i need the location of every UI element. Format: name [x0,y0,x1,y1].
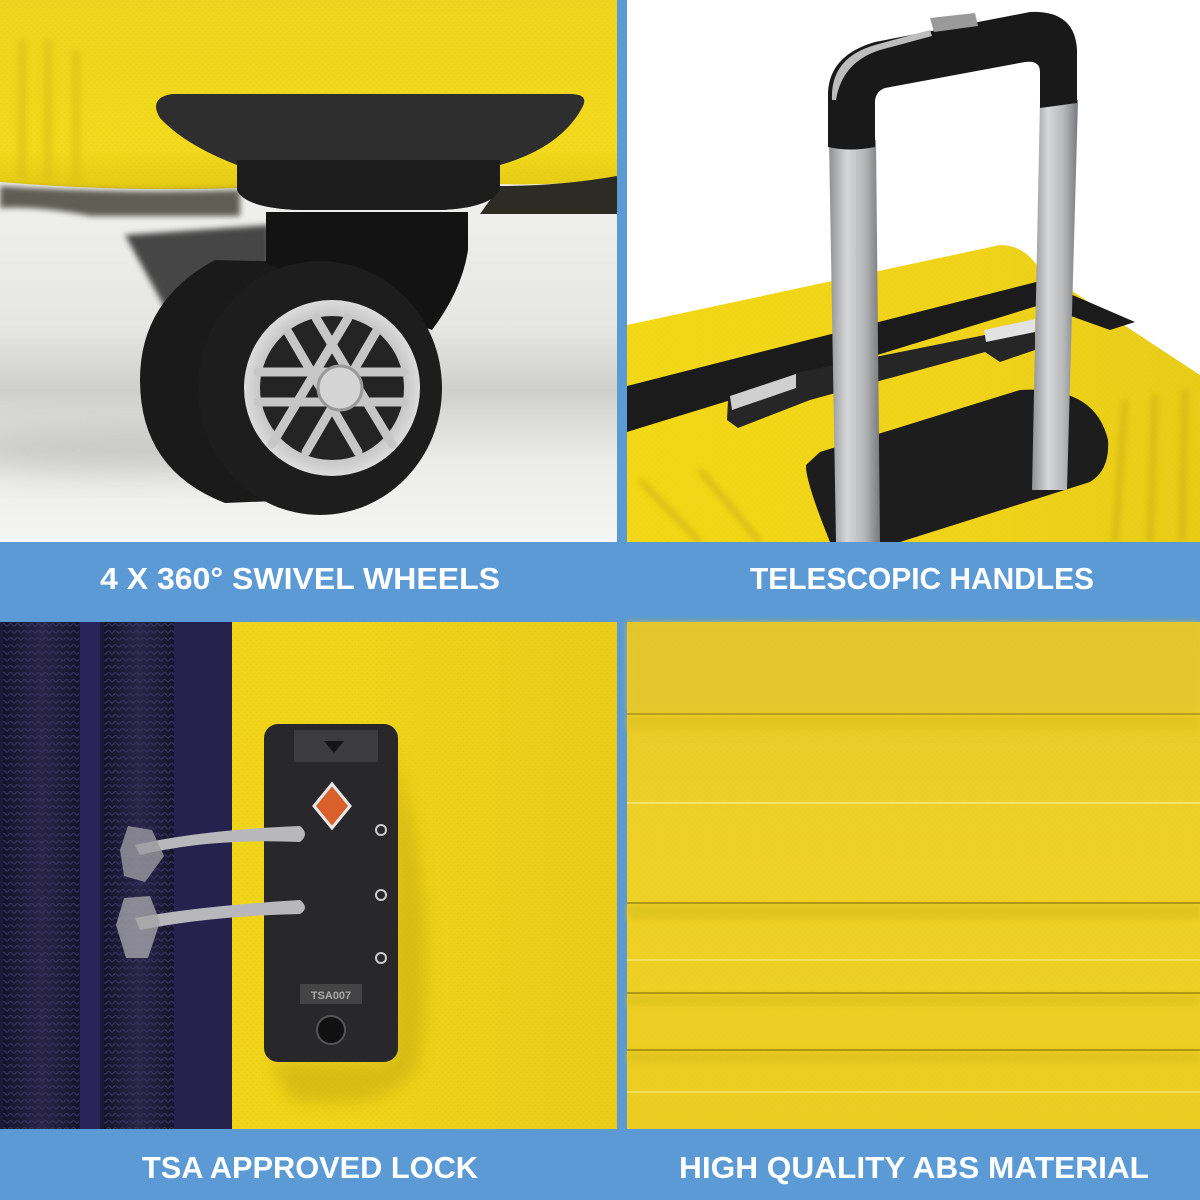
panel: swivel wheels photo [0,0,617,542]
panel: telescopic handles photo [627,0,1200,542]
icon: front wheel [244,261,442,515]
caption: ABS material: HIGH QUALITY ABS MATERIAL [679,1150,1149,1185]
suitcase ridges [22,40,76,184]
suitcase body [627,240,1200,542]
icon: zipper pull [727,319,1035,428]
icon: telescopic handle [828,12,1078,542]
icon: zipper pulls [116,826,305,958]
handle well [806,390,1108,542]
icon: wheel base plate [156,94,584,210]
panel: TSA lock photo [0,622,617,1129]
caption: TSA lock: TSA APPROVED LOCK [142,1150,479,1185]
caption: swivel wheels: 4 X 360° SWIVEL WHEELS [100,561,500,596]
zipper [627,281,1135,432]
icon: TSA combination lock: TSA007 [311,990,351,1002]
panel: ABS material photo [627,622,1200,1129]
icon: rear wheel [125,225,300,503]
icon: TSA combination lock [264,724,398,1062]
lock shadow [270,750,426,1103]
floor shadow [0,421,187,484]
under-case shadow [0,186,240,216]
icon: wheel fork [266,212,468,330]
caption: telescopic handles: TELESCOPIC HANDLES [750,561,1094,596]
ridges [640,390,1185,542]
